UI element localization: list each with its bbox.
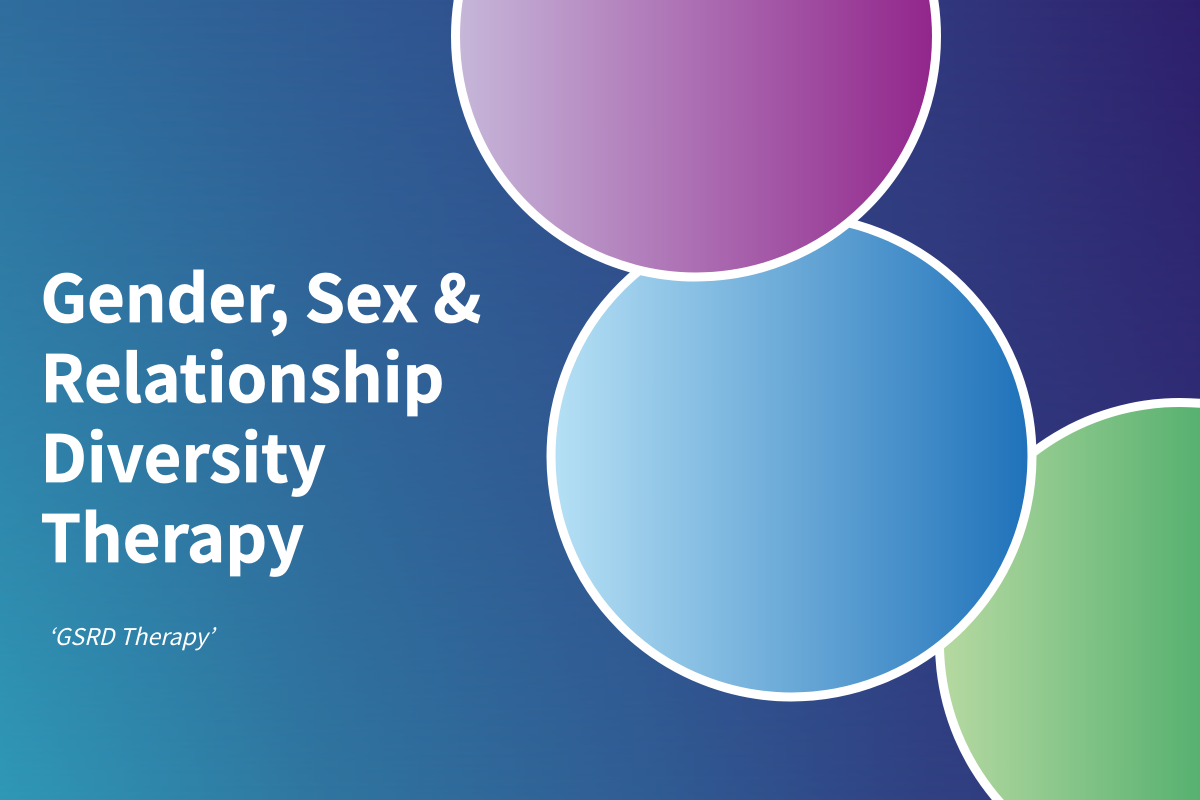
circle: purple bbox=[456, 0, 936, 277]
title: Gender, Sex & bbox=[40, 247, 481, 341]
background gradient bbox=[0, 163, 1200, 800]
title: Diversity bbox=[40, 407, 326, 501]
circle: green bbox=[935, 398, 1200, 800]
circle: blue bbox=[551, 216, 1032, 697]
title: Therapy bbox=[40, 487, 304, 581]
subtitle: ‘GSRD Therapy’ bbox=[48, 618, 214, 652]
title bbox=[40, 247, 481, 581]
title: Relationship bbox=[40, 327, 444, 421]
